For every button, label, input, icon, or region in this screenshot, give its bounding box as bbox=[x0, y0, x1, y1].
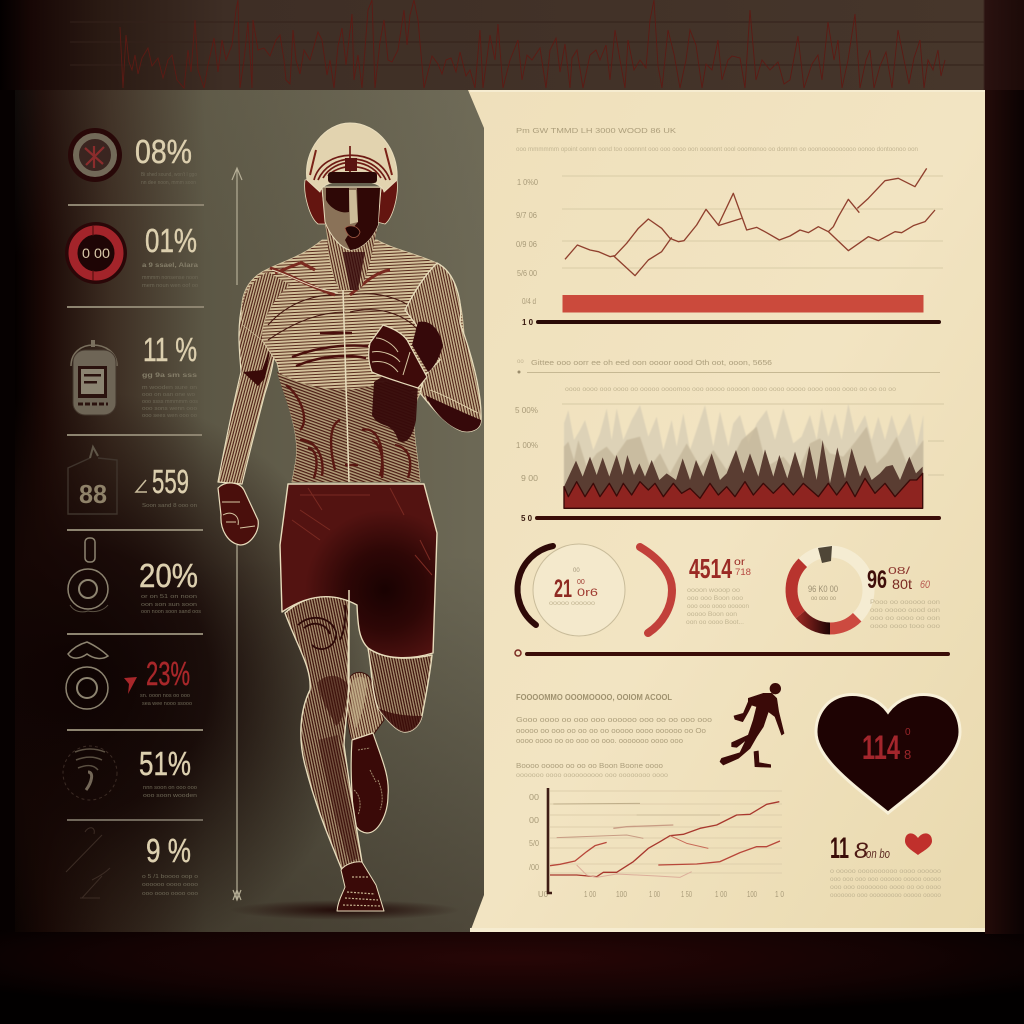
bottom dark band bbox=[0, 930, 1024, 1024]
stat: 4514 bbox=[686, 553, 751, 626]
stat: 4514: ooooo Boon oon bbox=[687, 612, 737, 618]
paragraph: ooooo oo ooo oo oo oo oo ooooo oooo oooooo oo Oo bbox=[516, 728, 706, 735]
caption: oon son sun soon bbox=[141, 602, 197, 608]
right dark margin bbox=[985, 88, 1024, 934]
icon: crossed target bbox=[68, 128, 122, 182]
panel edges bbox=[470, 90, 985, 932]
panel: dark left background bbox=[15, 90, 490, 932]
icon: ring with handle bbox=[68, 538, 108, 612]
gauge 1: 21 bbox=[554, 575, 572, 603]
axis labels: 1 00 bbox=[649, 890, 660, 899]
axis labels: 100 bbox=[616, 890, 627, 899]
caption: nnn soon on ooo ooo bbox=[143, 785, 197, 791]
left fist bbox=[218, 483, 258, 545]
gauge 1: 0r6 bbox=[577, 587, 598, 599]
caption: ooo ooo ooo ooo oooooo ooooo ooooo bbox=[830, 877, 942, 883]
helmet shell bbox=[307, 123, 397, 192]
visor bbox=[328, 172, 377, 183]
caption: mem noun wen oof oo bbox=[142, 283, 198, 289]
stat: 96: 60 bbox=[920, 579, 931, 591]
abdominal shadow bbox=[372, 373, 418, 442]
gauge 1 bbox=[518, 544, 625, 636]
stat: 96: Pooo oo oooooo oon bbox=[870, 600, 940, 606]
caption: m wooden sure on bbox=[142, 385, 197, 391]
axis labels: 0/9 06 bbox=[516, 240, 538, 249]
stat: 96: ooo ooooo oood oon bbox=[870, 608, 940, 614]
chart section 1 bbox=[516, 128, 943, 327]
thigh swirl bbox=[298, 605, 345, 649]
axis labels: 100 bbox=[747, 890, 757, 899]
axis labels: 5/6 00 bbox=[517, 269, 537, 278]
pectoral contour lines bbox=[268, 294, 425, 340]
donut chart bbox=[792, 546, 868, 628]
shorts side highlights bbox=[292, 488, 432, 575]
stat: 96 bbox=[867, 566, 941, 630]
knuckles bbox=[222, 502, 255, 528]
front knee shading bbox=[318, 676, 348, 726]
left shoulder bbox=[242, 272, 290, 340]
icon: chevron over ring bbox=[66, 642, 108, 709]
light peaks bbox=[564, 403, 923, 508]
torso bbox=[241, 240, 465, 482]
chart section 2 bbox=[515, 359, 944, 523]
axis rule: 5 0 bbox=[521, 514, 533, 523]
axis labels: 1 00 bbox=[584, 890, 596, 899]
left metric 8 bbox=[66, 828, 198, 898]
axis labels: U0 bbox=[538, 890, 549, 899]
caption bbox=[141, 594, 201, 615]
heading bbox=[517, 359, 940, 374]
caption: a 9 ssael, Alara bbox=[142, 263, 199, 269]
axis labels: 5 00% bbox=[515, 406, 538, 415]
value: 20% bbox=[139, 557, 198, 594]
axis labels: 00 bbox=[529, 793, 540, 802]
axis labels: 5/0 bbox=[529, 839, 539, 848]
axis labels: 1 00 bbox=[715, 890, 727, 899]
stat: 96: 96 bbox=[867, 566, 887, 594]
stat: 4514: or bbox=[734, 557, 746, 568]
rear thigh bbox=[368, 648, 432, 732]
axis labels bbox=[516, 178, 539, 306]
caption: sea wee nooo ssooo bbox=[142, 701, 192, 707]
knee shading bbox=[378, 708, 422, 732]
stat: 4514: 718 bbox=[735, 567, 751, 577]
caption bbox=[142, 263, 199, 289]
stat: resting value: 11 bbox=[830, 832, 849, 865]
bottom left text bbox=[516, 693, 712, 779]
icon: red flash bbox=[124, 677, 137, 694]
right arm bbox=[405, 263, 481, 432]
value: 9 % bbox=[146, 832, 191, 869]
nose bbox=[349, 190, 358, 224]
icon: small heart bbox=[905, 833, 932, 855]
icon: faint dial bbox=[63, 746, 117, 800]
rear shoe bbox=[351, 733, 388, 833]
gauge row bbox=[515, 544, 950, 656]
subheading: Boooo ooooo oo oo oo Boon Boone oooo bbox=[516, 763, 663, 770]
axis rule bbox=[522, 318, 941, 327]
helmet block bbox=[345, 158, 357, 171]
value: 11 % bbox=[143, 331, 197, 368]
runner figure bbox=[218, 123, 481, 911]
caption: ooo oooo oooo ooo bbox=[142, 891, 198, 897]
stat: 4514: ooo ooo oooo ooooon bbox=[687, 604, 749, 610]
neck bbox=[325, 225, 378, 290]
grid bbox=[562, 176, 943, 268]
helmet stripes bbox=[314, 146, 390, 180]
gauge 1: ooooo oooooo bbox=[549, 601, 596, 607]
front shoe bbox=[337, 862, 384, 911]
shorts bbox=[280, 484, 437, 658]
caption: ooo on oan one wo bbox=[142, 392, 195, 398]
caption: gg 9a sm sss bbox=[142, 373, 198, 379]
shoe laces bbox=[343, 877, 381, 906]
shoe stitching bbox=[354, 748, 382, 815]
eye socket bbox=[326, 188, 349, 212]
forearm shadow bbox=[425, 395, 481, 432]
left metric 3 bbox=[71, 331, 198, 419]
ground shadow bbox=[230, 900, 460, 920]
stat: 4514: oooon wooop oo bbox=[687, 588, 741, 594]
trend lines bbox=[550, 802, 780, 877]
heart with value: 114 bbox=[862, 729, 900, 767]
heart with value: 0 bbox=[905, 727, 911, 738]
stat: 4514: oon oo oooo Boot... bbox=[686, 620, 744, 626]
caption bbox=[140, 693, 192, 707]
chart section 3 bbox=[529, 788, 784, 899]
axis labels: 1 0 bbox=[775, 890, 784, 899]
axis labels: 1 50 bbox=[681, 890, 692, 899]
icon: red gauge: 0 00 bbox=[82, 245, 110, 261]
axis rule: 1 0 bbox=[522, 318, 534, 327]
front leg bbox=[285, 596, 362, 870]
stat: 4514: 4514 bbox=[689, 553, 732, 584]
red bar bbox=[562, 295, 924, 312]
subheading bbox=[516, 763, 669, 779]
rear calf highlight bbox=[351, 677, 367, 728]
caption: ooooooo ooo ooooooooo ooooo ooooo bbox=[830, 893, 942, 899]
head bbox=[305, 123, 397, 250]
neck shadow bbox=[343, 252, 365, 290]
value: 23% bbox=[146, 655, 190, 692]
ear guards bbox=[305, 178, 397, 224]
caption: o ooooo oooooooooo oooo oooooo bbox=[830, 869, 942, 875]
stat: 96: 08/ bbox=[888, 566, 910, 577]
collarbone details bbox=[270, 262, 390, 295]
axis labels: /00 bbox=[529, 863, 539, 872]
caption: Soon sand 8 ooo on bbox=[142, 503, 197, 509]
paragraph: oooo oooo oo oo ooo oo ooo. ooooooo oooo ooo bbox=[516, 738, 683, 745]
stat: resting value bbox=[830, 832, 942, 899]
vertical axis bbox=[548, 788, 552, 893]
axis labels: 0/4 d bbox=[522, 297, 536, 306]
stat: 96: oooo oooo tooo ooo bbox=[870, 624, 941, 630]
caption: o 5 /1 boooo oop o bbox=[142, 874, 198, 880]
icon: faint strokes bbox=[66, 828, 110, 898]
caption: mmmm nonsense noon bbox=[142, 275, 198, 281]
caption: ooo sons wenn ooo bbox=[142, 406, 197, 412]
caption bbox=[142, 874, 198, 897]
caption bbox=[830, 869, 942, 899]
axis labels: 1 0%0 bbox=[517, 178, 539, 187]
gauge 1: 00 bbox=[577, 579, 585, 586]
rear calf bbox=[346, 672, 384, 742]
left arm bbox=[218, 300, 275, 484]
top strip: heart-rate trace bbox=[0, 0, 1024, 90]
axis labels bbox=[529, 793, 784, 899]
stat: 96: ooo oo oooo oo oon bbox=[870, 616, 940, 622]
panel: cream right background bbox=[468, 90, 985, 932]
red area bbox=[564, 473, 923, 508]
caption bbox=[141, 172, 197, 186]
icon: tag with figures: 88 bbox=[79, 479, 107, 509]
value: 08% bbox=[135, 133, 192, 170]
grid lines bbox=[550, 791, 782, 873]
elbow highlight bbox=[430, 390, 478, 413]
center line bbox=[343, 290, 349, 692]
right fist bbox=[369, 325, 427, 388]
heart with value: 8 bbox=[904, 747, 911, 762]
paragraph: Gooo oooo oo ooo ooo oooooo ooo oo oo ooo ooo bbox=[516, 717, 712, 724]
abdomen bbox=[277, 372, 420, 482]
grid bbox=[562, 404, 944, 475]
caption: ooo sees wen ooo oo bbox=[142, 413, 197, 419]
left metric 7 bbox=[63, 745, 197, 800]
icon: device bbox=[71, 340, 117, 415]
abdominal muscle lines bbox=[286, 385, 410, 478]
stat: resting value: on bo bbox=[866, 846, 890, 861]
line chart bbox=[565, 168, 935, 276]
caption bbox=[142, 373, 198, 419]
value: 51% bbox=[139, 745, 191, 782]
left metric 1 bbox=[68, 128, 197, 186]
donut chart: oo ooo oo bbox=[811, 596, 837, 602]
axis labels: 00 bbox=[529, 816, 540, 825]
stat: resting value: 8 bbox=[854, 838, 869, 863]
left metric 6 bbox=[66, 642, 192, 709]
stat: 96: 80t bbox=[892, 576, 912, 592]
axis rule bbox=[521, 514, 941, 523]
front shin shading bbox=[318, 735, 358, 862]
heading: FOOOOMMO OOOMOOOO, OOIOM ACOOL bbox=[516, 693, 672, 702]
mouth bbox=[345, 226, 360, 238]
red arc bbox=[640, 547, 672, 633]
paragraph bbox=[516, 717, 712, 745]
left metric 5 bbox=[68, 538, 201, 615]
shaded cheek bbox=[345, 188, 380, 250]
caption: sn. ooon nos oo ooo bbox=[140, 693, 190, 699]
axis labels bbox=[515, 406, 539, 483]
heart with value bbox=[816, 695, 960, 813]
caption: ooo ooo oooooooo oooo oo oo oooo bbox=[830, 885, 942, 891]
value: 01% bbox=[145, 222, 197, 259]
area chart bbox=[564, 403, 923, 508]
caption: nn dee noon, mmm soon bbox=[141, 180, 196, 186]
heading: oo bbox=[517, 359, 524, 365]
face bbox=[322, 187, 381, 250]
value: 559 bbox=[152, 463, 189, 500]
caption: oooooo oooo oooo bbox=[142, 882, 198, 888]
fingers bbox=[372, 338, 410, 375]
heading: Gittee ooo oorr ee oh eed oon oooor oood Oth oot, ooon, 5656 bbox=[531, 360, 772, 367]
armpit shadow bbox=[412, 322, 443, 372]
elbow shading bbox=[243, 345, 271, 386]
gauge 1: 00 bbox=[573, 568, 580, 574]
subheading: ooooooo oooo oooooooooo ooo oooooooo oooo bbox=[516, 773, 669, 779]
subheading: oooo oooo ooo oooo oo ooooo oooomoo ooo ooooo ooooon oooo oooo ooooo oooo oooo oooo oo oo oo oo bbox=[565, 387, 897, 393]
stat: 4514: ooo ooo Boon ooo bbox=[687, 596, 744, 602]
icon: running silhouette bbox=[720, 683, 784, 767]
caption: ooo ssss mmmmm oos bbox=[142, 399, 198, 405]
height arrow bbox=[232, 168, 242, 900]
axis labels: 1 00% bbox=[516, 441, 538, 450]
caption bbox=[143, 785, 197, 799]
subheading: ooo mmmmmm opoint oonnn oond too ooonnnt ooo ooo oooo oon ooonont oool ooomonoo oo donnnn oo ooonoooooooooo oonoo dontoonoo oon bbox=[516, 147, 918, 153]
axis labels: 9 00 bbox=[521, 474, 539, 483]
left metric 2 bbox=[65, 222, 199, 289]
mid peaks bbox=[564, 427, 923, 508]
donut chart: 96 K0 00 bbox=[808, 584, 838, 594]
dark peaks bbox=[564, 440, 923, 508]
axis rule bbox=[515, 650, 950, 656]
axis labels: 9/7 06 bbox=[516, 211, 538, 220]
caption: Bi shed sound, won't I ggo bbox=[141, 172, 197, 178]
left metric 4 bbox=[68, 447, 197, 514]
caption: oon noon soon sand oos bbox=[141, 609, 201, 615]
caption: or on 51 on noon bbox=[141, 594, 197, 600]
heading: Pm GW TMMD LH 3000 WOOD 86 UK bbox=[516, 128, 676, 135]
chest bands bbox=[292, 333, 368, 366]
caption: ooo soon wooden bbox=[143, 793, 197, 799]
